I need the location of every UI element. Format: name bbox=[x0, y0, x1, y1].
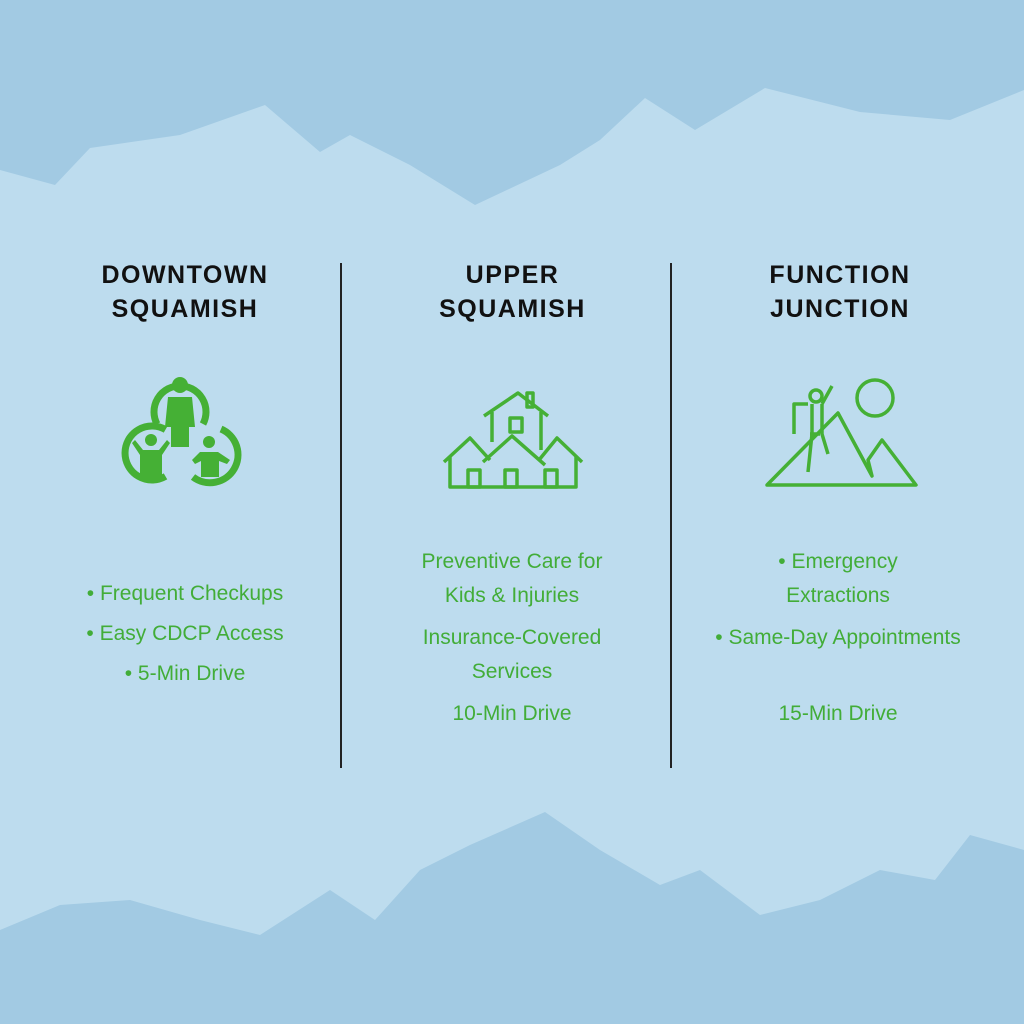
heading: Downtown Squamish: DOWNTOWN bbox=[101, 261, 269, 289]
icon: community people bbox=[122, 377, 242, 486]
text: downtown bullets bbox=[86, 582, 284, 685]
text: function junction services: • Same-Day Appointments bbox=[715, 626, 961, 649]
heading: Function Junction: JUNCTION bbox=[770, 295, 910, 323]
heading: Upper Squamish: SQUAMISH bbox=[439, 295, 586, 323]
heading: Function Junction: FUNCTION bbox=[769, 261, 911, 289]
icon: houses bbox=[442, 391, 584, 489]
text: function junction services: • Emergency bbox=[778, 550, 898, 573]
text: upper squamish services bbox=[422, 550, 602, 725]
text: upper squamish services: 10-Min Drive bbox=[452, 702, 572, 725]
text: upper squamish services: Insurance-Covered bbox=[423, 626, 601, 649]
heading: Downtown Squamish: SQUAMISH bbox=[112, 295, 258, 323]
text: downtown bullets: • Frequent Checkups bbox=[87, 582, 283, 605]
text: downtown bullets: • 5-Min Drive bbox=[125, 662, 245, 685]
text: upper squamish services: Services bbox=[472, 660, 552, 683]
icon: climber on mountain bbox=[765, 378, 918, 487]
heading: Function Junction bbox=[769, 261, 911, 323]
text: upper squamish services: Preventive Care for bbox=[422, 550, 602, 573]
text: downtown bullets: • Easy CDCP Access bbox=[86, 622, 284, 645]
text: function junction services bbox=[715, 550, 961, 725]
text: function junction services: Extractions bbox=[786, 584, 890, 607]
heading: Downtown Squamish bbox=[101, 261, 269, 323]
heading: Upper Squamish bbox=[439, 261, 586, 323]
heading: Upper Squamish: UPPER bbox=[466, 261, 559, 289]
text: upper squamish services: Kids & Injuries bbox=[445, 584, 579, 607]
text: function junction services: 15-Min Drive bbox=[778, 702, 898, 725]
